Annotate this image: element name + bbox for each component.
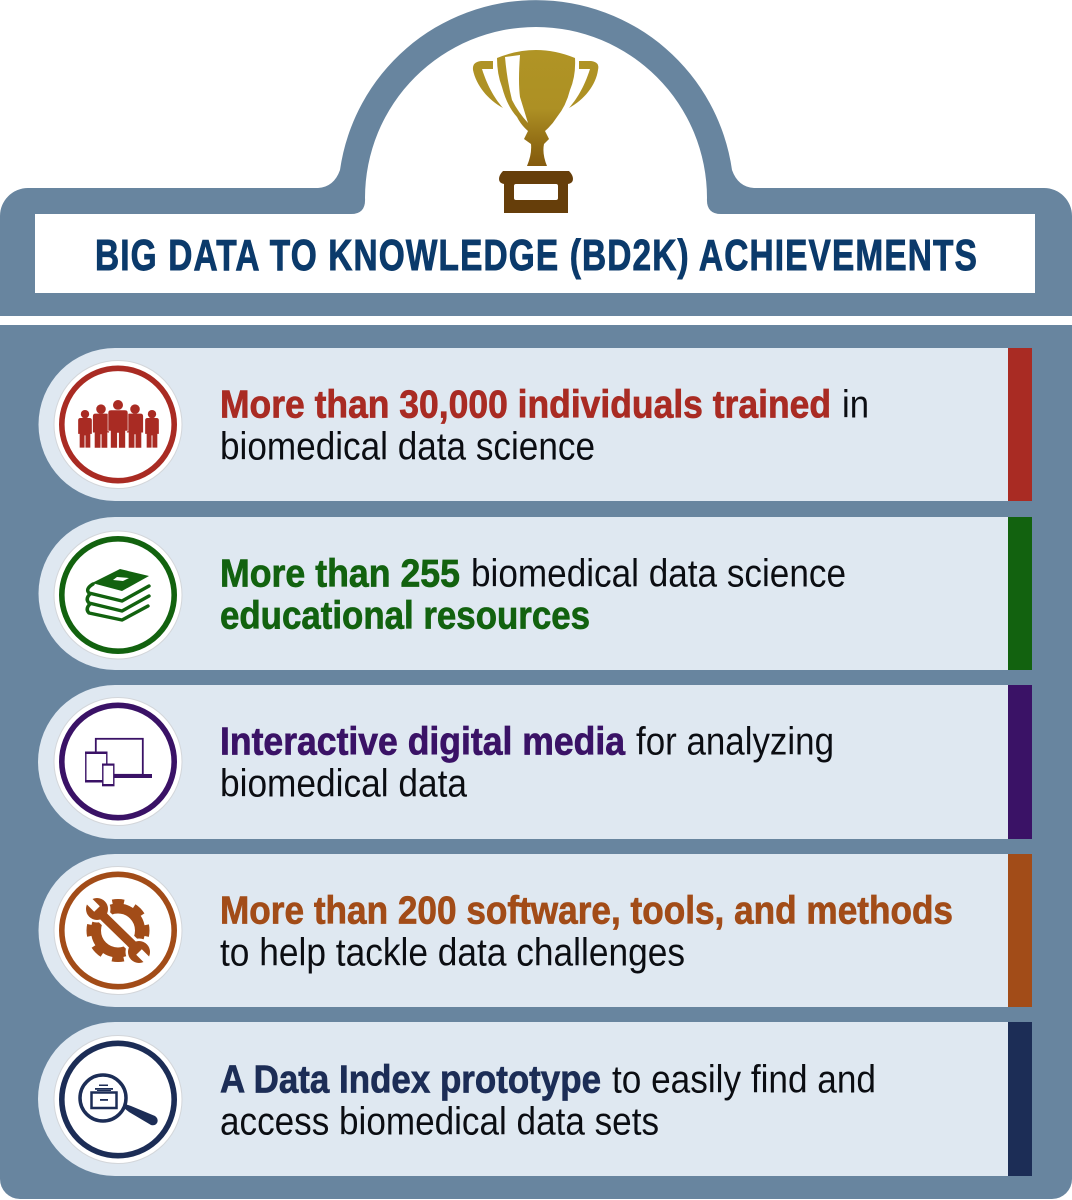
panel: software, tools, methods: [39, 854, 1032, 1007]
text: individuals trained: [220, 384, 869, 468]
text: individuals trained: More than 30,000 individuals trained: [220, 384, 831, 426]
icon: books in circle: [54, 531, 182, 659]
icon: magnifier and file box in circle: [54, 1036, 182, 1164]
icon: people in circle: [54, 360, 182, 488]
text: educational resources: More than 255: [220, 552, 460, 596]
text: data index prototype: access biomedical data sets: [220, 1100, 659, 1144]
color bar: red: [1008, 348, 1032, 501]
panel: individuals trained: [39, 348, 1032, 501]
icon: gear and wrench in circle: [54, 866, 182, 994]
text: interactive digital media: Interactive digital media: [220, 720, 625, 764]
text: interactive digital media: for analyzing: [636, 720, 834, 764]
main panel background: [0, 325, 1072, 1199]
icon: trophy: [473, 50, 598, 213]
color bar: orange: [1008, 854, 1032, 1007]
text: software, tools, methods: [220, 890, 953, 974]
text: interactive digital media: [220, 720, 834, 806]
header frame with arch: [0, 0, 1072, 316]
text: software, tools, methods: More than 200 software, tools, and methods: [220, 890, 953, 932]
text: individuals trained: in: [842, 384, 869, 426]
text: educational resources: [220, 552, 846, 638]
text: interactive digital media: biomedical data: [220, 762, 467, 806]
text: data index prototype: [220, 1058, 876, 1144]
panel: educational resources: [39, 517, 1032, 670]
text: educational resources: biomedical data science: [471, 552, 846, 596]
panel: interactive digital media: [38, 685, 1032, 839]
text: educational resources: educational resources: [220, 594, 590, 638]
text: data index prototype: A Data Index prototype: [220, 1058, 601, 1102]
color bar: purple: [1008, 685, 1032, 839]
icon: devices in circle: [54, 698, 182, 826]
text: individuals trained: biomedical data science: [220, 426, 595, 468]
color bar: navy: [1008, 1022, 1032, 1176]
color bar: green: [1008, 517, 1032, 670]
panel: data index prototype: [38, 1022, 1032, 1176]
text: software, tools, methods: to help tackle data challenges: [220, 932, 685, 974]
text: data index prototype: to easily find and: [612, 1058, 876, 1102]
